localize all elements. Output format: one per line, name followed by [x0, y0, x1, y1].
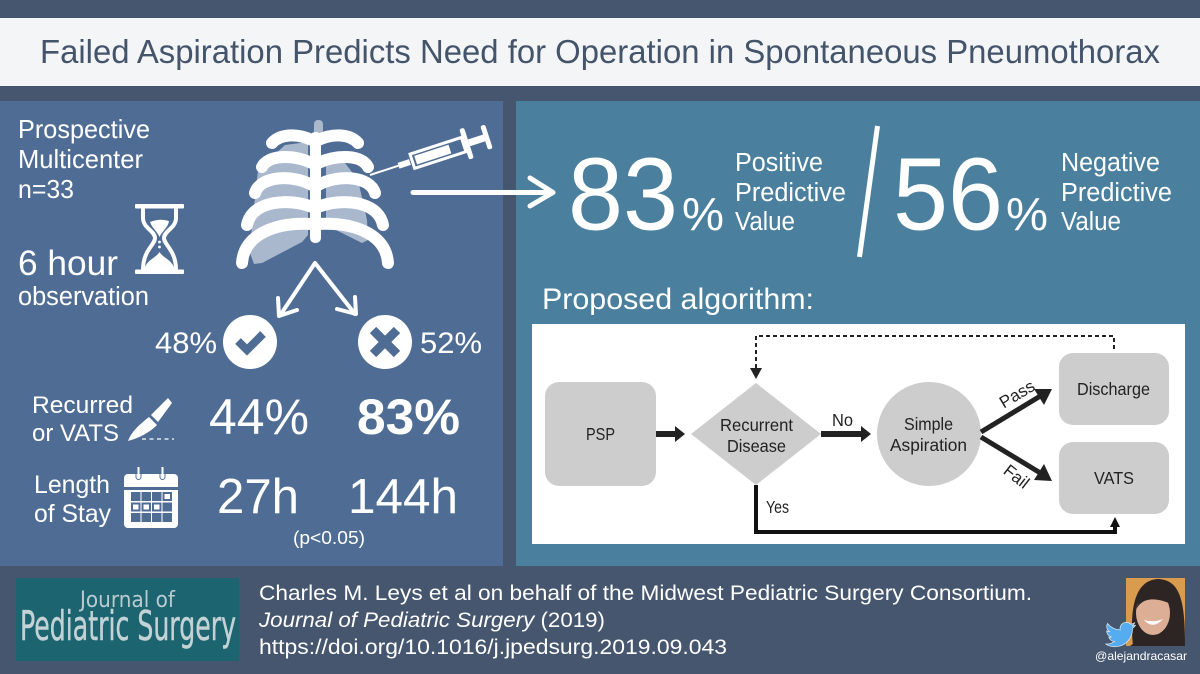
- row label: length of stay: [34, 471, 111, 528]
- row label: recurred or VATS: Recurred: [32, 392, 133, 419]
- stat: positive predictive value: [568, 136, 846, 252]
- outcome percentages: [155, 327, 482, 360]
- icon: scalpel: [128, 398, 174, 441]
- node: recurrent disease: Recurrent: [720, 415, 793, 435]
- observation text: 6 hour: [18, 244, 118, 283]
- arrow: results: [413, 178, 553, 206]
- title: [0, 18, 1200, 86]
- icon: check circle: [223, 315, 277, 369]
- row values: length of stay: [217, 469, 458, 524]
- journal logo: Journal of: [78, 588, 176, 613]
- outcome percentages: 52%: [420, 327, 482, 360]
- row values: recurred or VATS: 44%: [209, 389, 309, 445]
- row label: recurred or VATS: or VATS: [32, 420, 119, 447]
- node: recurrent disease: Disease: [727, 436, 786, 456]
- stat: positive predictive value: %: [682, 188, 724, 240]
- node: PSP: [545, 382, 656, 486]
- observation text: [18, 244, 149, 311]
- node: discharge: Discharge: [1077, 379, 1150, 399]
- node: simple aspiration: Aspiration: [890, 435, 967, 455]
- citation: Journal of Pediatric Surgery (2019): [258, 608, 605, 632]
- icon: hourglass: [135, 204, 184, 274]
- journal logo: [16, 578, 239, 661]
- arrow: no: No: [832, 410, 853, 430]
- stat: negative predictive value: %: [1006, 188, 1048, 240]
- node: simple aspiration: [877, 382, 981, 486]
- study design text: n=33: [18, 174, 74, 204]
- row values: recurred or VATS: [209, 389, 460, 445]
- stat: negative predictive value: Predictive: [1061, 179, 1172, 207]
- p value: (p<0.05): [293, 527, 365, 548]
- node: simple aspiration: Simple: [904, 414, 953, 434]
- citation: [258, 581, 1032, 659]
- study design text: Prospective: [18, 114, 150, 144]
- node: discharge: [1059, 353, 1169, 425]
- flowchart: [532, 324, 1185, 544]
- node: recurrent disease: [691, 383, 821, 485]
- node: PSP: PSP: [586, 424, 615, 444]
- study design text: [18, 114, 150, 204]
- row label: length of stay: Length: [34, 471, 110, 499]
- study design text: Multicenter: [18, 144, 143, 174]
- icon: calendar: [124, 467, 178, 528]
- row values: length of stay: 27h: [217, 469, 299, 524]
- stat: negative predictive value: Negative: [1061, 149, 1160, 177]
- citation: https://doi.org/10.1016/j.jpedsurg.2019.09.043: [259, 635, 727, 659]
- journal logo: Pediatric Surgery: [20, 602, 236, 650]
- arrow: yes: [756, 485, 1120, 532]
- citation: Charles M. Leys et al on behalf of the Midwest Pediatric Surgery Consortium.: [259, 581, 1032, 605]
- icon: x circle: [358, 315, 412, 369]
- arrows: branch outcomes: [278, 263, 356, 316]
- panel: study summary: [0, 101, 503, 566]
- observation text: observation: [18, 283, 149, 311]
- arrow: PSP to recurrent disease: [656, 426, 685, 442]
- stat: positive predictive value: Value: [735, 208, 795, 236]
- stat: positive predictive value: Predictive: [735, 179, 846, 207]
- arrow: dashed return: [750, 336, 1114, 379]
- heading: proposed algorithm: Proposed algorithm:: [542, 283, 814, 316]
- stat: negative predictive value: Value: [1061, 208, 1121, 236]
- node: VATS: VATS: [1094, 468, 1134, 488]
- row values: length of stay: 144h: [348, 469, 458, 524]
- arrow: yes: Yes: [766, 497, 789, 517]
- title: Failed Aspiration Predicts Need for Operation in Spontaneous Pneumothorax: [40, 34, 1160, 71]
- stat: positive predictive value: Positive: [735, 149, 823, 177]
- row label: recurred or VATS: [32, 392, 133, 447]
- row label: length of stay: of Stay: [34, 500, 111, 528]
- arrow: no: [821, 410, 871, 442]
- twitter handle: @alejandracasar: [1095, 649, 1187, 663]
- author photo: [1126, 578, 1185, 646]
- divider slash: [860, 126, 878, 257]
- row values: recurred or VATS: 83%: [357, 389, 460, 445]
- arrow: fail: [981, 437, 1052, 493]
- stat: negative predictive value: 56: [893, 136, 1003, 252]
- arrow: pass: Pass: [996, 376, 1038, 412]
- outcome percentages: 48%: [155, 327, 217, 360]
- arrow: pass: [981, 376, 1052, 432]
- node: VATS: [1059, 442, 1169, 514]
- icon: lungs and rib cage: [242, 120, 388, 264]
- icon: twitter bird: [1106, 622, 1136, 647]
- icon: syringe: [365, 121, 494, 190]
- arrow: fail: Fail: [1000, 461, 1033, 493]
- panel: results and algorithm: [413, 101, 1200, 566]
- stat: positive predictive value: 83: [568, 136, 678, 252]
- stat: negative predictive value: [893, 136, 1172, 252]
